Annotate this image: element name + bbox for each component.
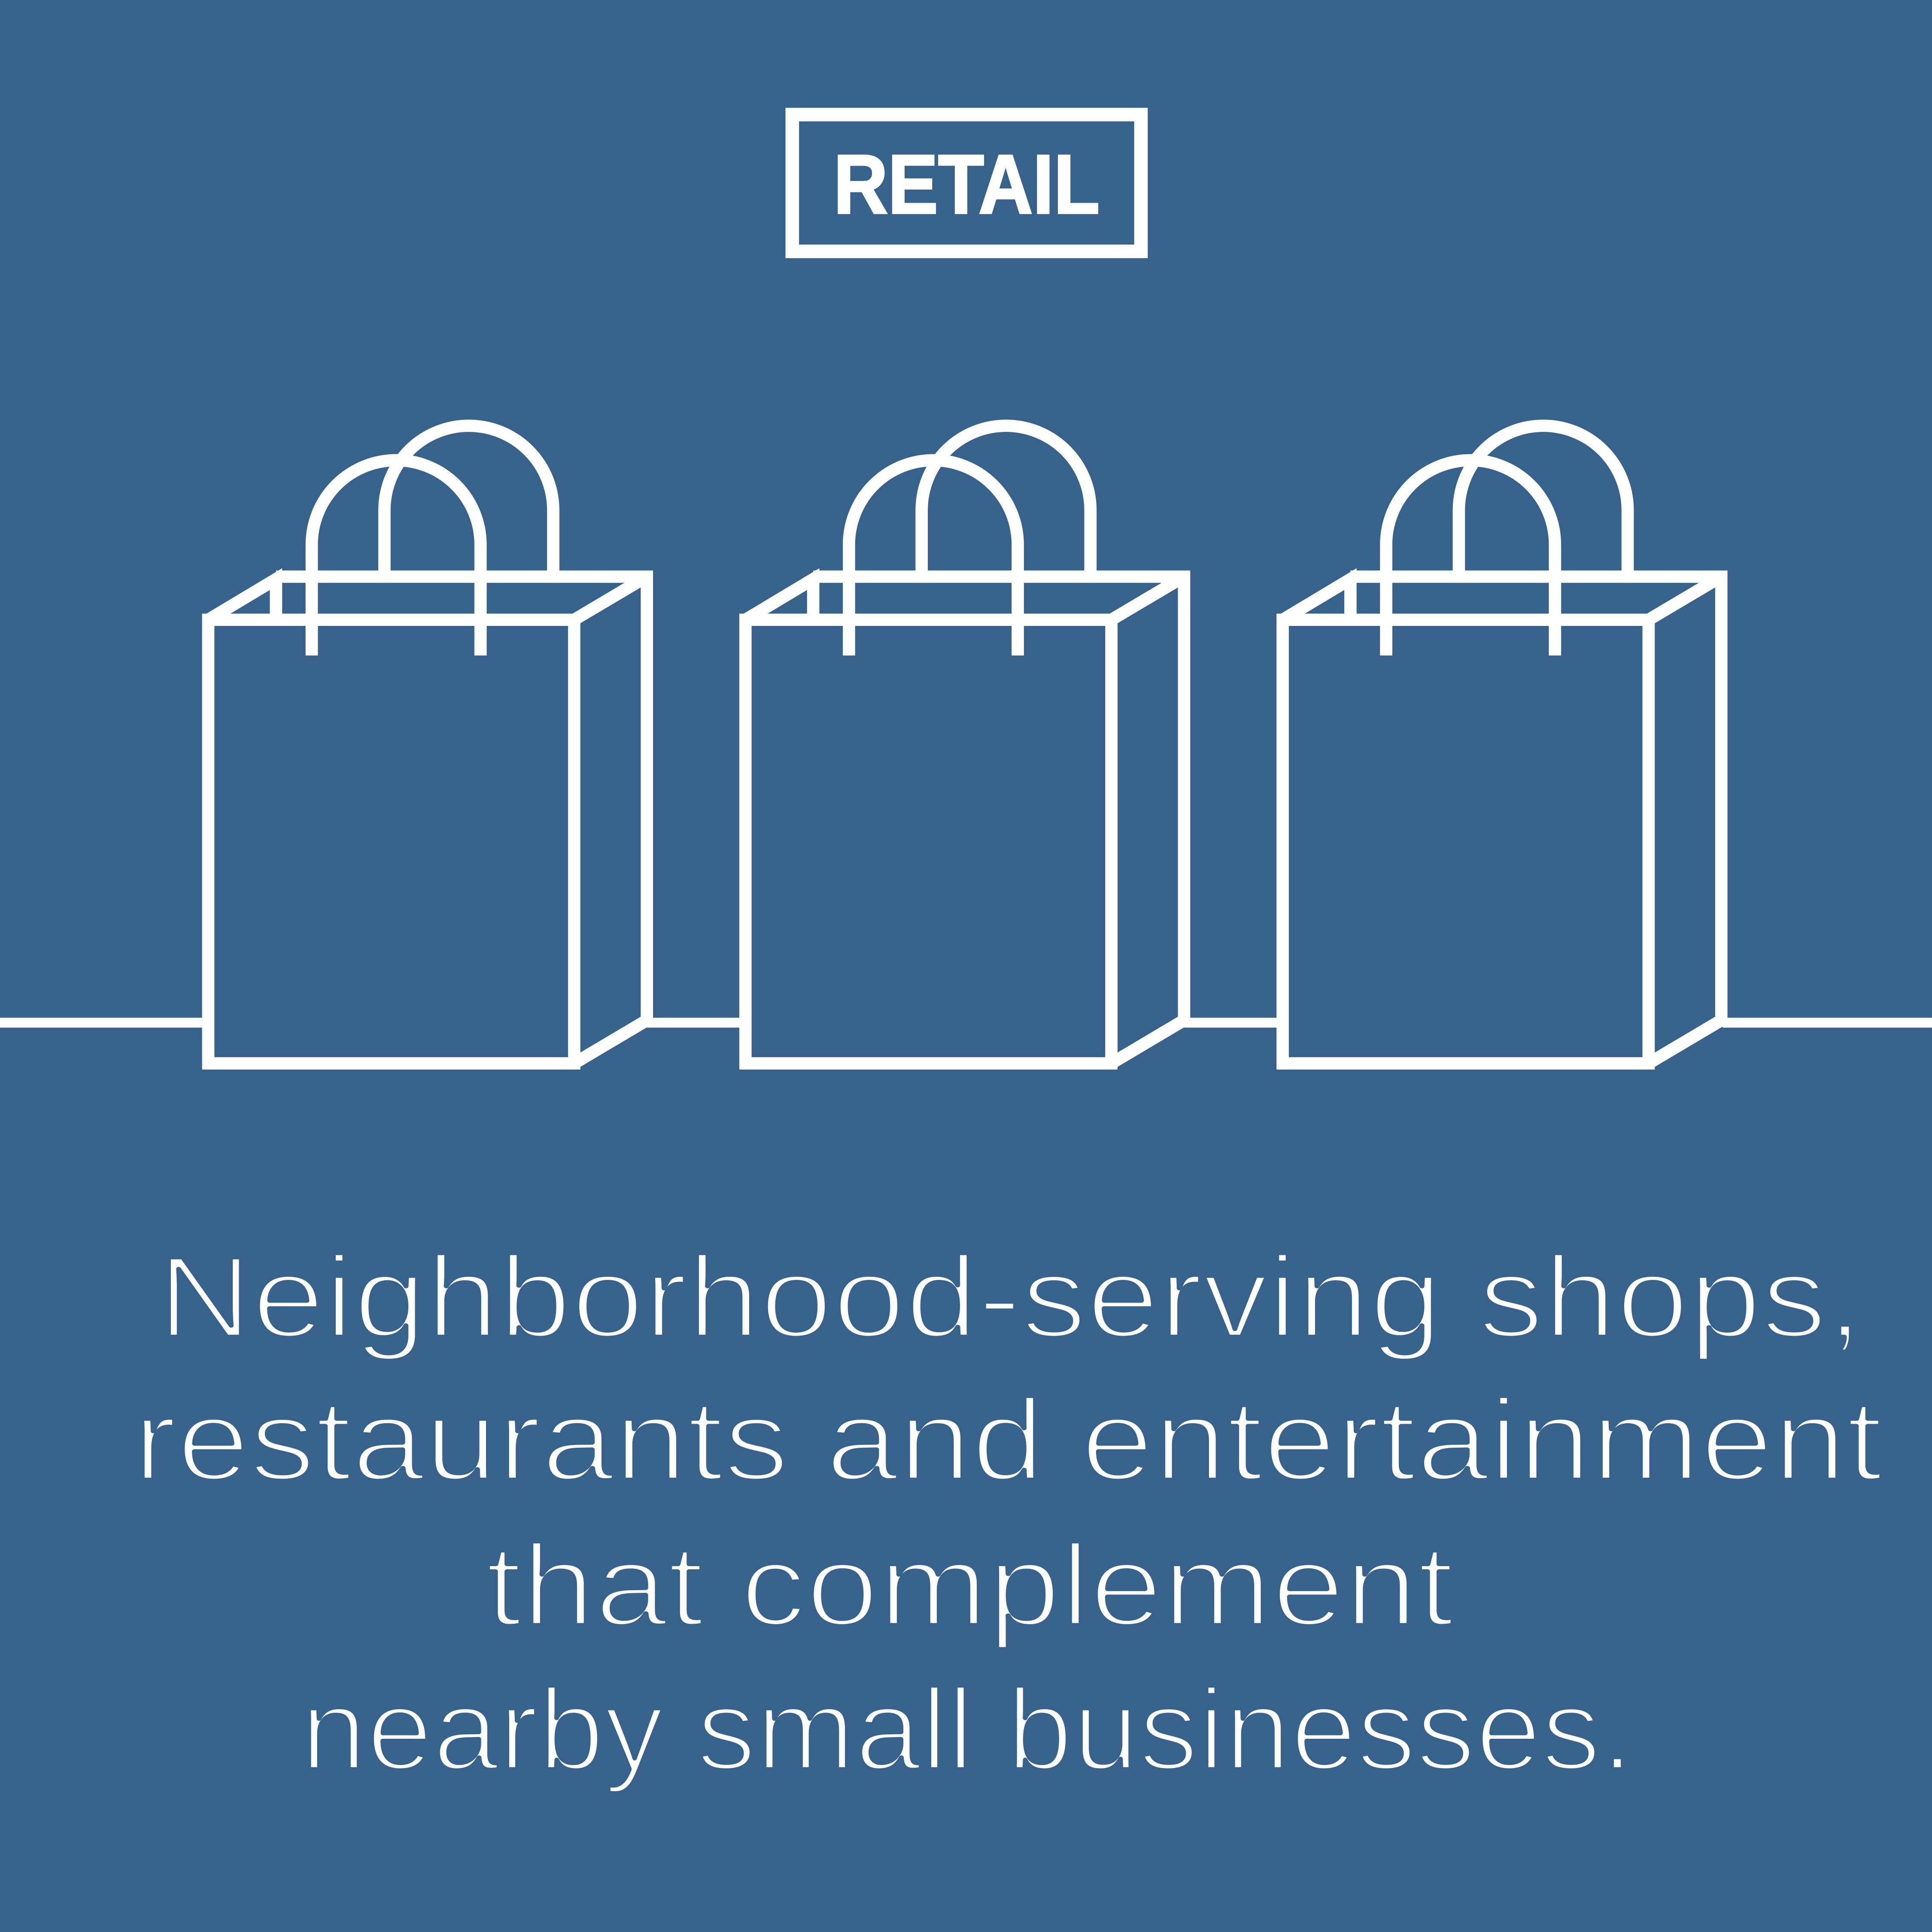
ground line (0, 1021, 1932, 1024)
title: RETAIL (792, 115, 1141, 251)
text block: description: Neighborhood-serving shops, (158, 1233, 1863, 1362)
text block: description: that complement (486, 1521, 1455, 1650)
icon: shopping bag 1 (208, 426, 647, 1063)
icon: shopping bag 2 (745, 426, 1184, 1063)
text block: description: restaurants and entertainment (133, 1376, 1883, 1505)
icon: shopping bag 3 (1283, 426, 1721, 1063)
title: RETAIL: RETAIL (833, 137, 1100, 231)
text block: description (133, 1233, 1883, 1795)
text block: description: nearby small businesses. (301, 1665, 1634, 1795)
